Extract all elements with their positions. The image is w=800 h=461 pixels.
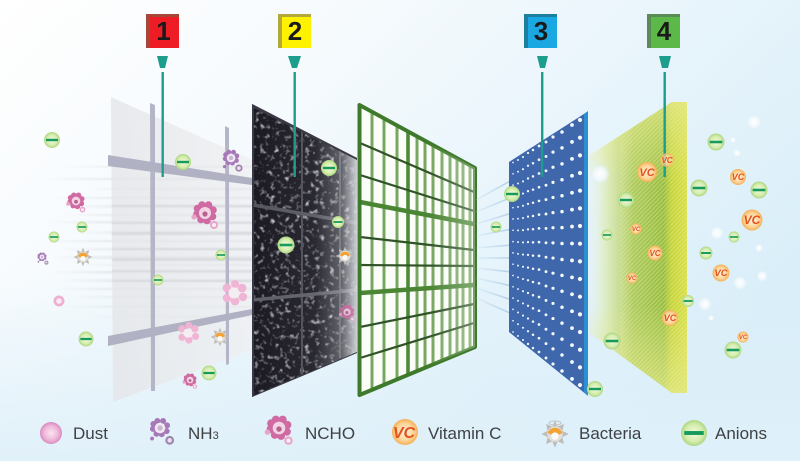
NCHO particles bbox=[66, 193, 355, 389]
panel 2: dark carbon filter bbox=[252, 104, 357, 397]
bacteria particles bbox=[74, 247, 354, 346]
badge 2: 2 bbox=[288, 16, 302, 46]
legend: NCHO: NCHO bbox=[305, 424, 355, 443]
badge 3: 3 bbox=[534, 16, 548, 46]
streaks over the mesh bbox=[112, 205, 252, 282]
badge 4 bbox=[647, 14, 680, 48]
legend: vitamin C: Vitamin C bbox=[428, 424, 501, 443]
badge 2 bbox=[278, 14, 311, 48]
badge 1: 1 bbox=[156, 16, 171, 46]
dust particle bbox=[54, 296, 64, 306]
badge 3 bbox=[524, 14, 557, 48]
badge 4: 4 bbox=[657, 16, 672, 46]
vitamin C particles: VC bbox=[661, 156, 673, 165]
legend: dust bbox=[40, 422, 108, 444]
vitamin C particles: VC bbox=[628, 276, 637, 282]
pointer 3 bbox=[537, 56, 548, 177]
legend: NCHO bbox=[265, 416, 355, 445]
air bubbles bbox=[590, 114, 768, 322]
panel 3: green frame filter bbox=[358, 104, 475, 396]
legend bbox=[40, 416, 767, 448]
badge 1 bbox=[146, 14, 179, 48]
airflow between frame and blue filter bbox=[476, 180, 512, 314]
legend: bacteria bbox=[541, 420, 642, 448]
pointer 1 bbox=[157, 56, 168, 177]
legend: anions: Anions bbox=[715, 424, 767, 443]
legend: vitamin C bbox=[392, 419, 501, 445]
legend: vitamin C: VC bbox=[393, 425, 416, 442]
panel 4: blue perforated filter bbox=[509, 111, 588, 396]
pointer 2 bbox=[288, 56, 301, 177]
incoming air streaks bbox=[40, 166, 252, 318]
legend: bacteria: Bacteria bbox=[579, 424, 642, 443]
vitamin C particles bbox=[626, 153, 762, 342]
vitamin C particles: VC bbox=[632, 227, 641, 233]
vitamin C particles: VC bbox=[744, 213, 761, 227]
vitamin C particles: VC bbox=[739, 335, 748, 341]
legend: dust: Dust bbox=[73, 424, 108, 443]
panel 1: pre-filter mesh bbox=[108, 97, 252, 402]
vitamin C particles: VC bbox=[664, 313, 677, 323]
legend: NH3 bbox=[150, 418, 219, 445]
panel 5: green vitamin C filter bbox=[590, 100, 687, 395]
vitamin C particles: VC bbox=[714, 268, 728, 279]
vitamin C particles: VC bbox=[649, 249, 661, 258]
vitamin C particles: VC bbox=[639, 167, 656, 179]
anion particles bbox=[44, 132, 768, 397]
vitamin C particles: VC bbox=[732, 172, 745, 182]
legend: NH3: NH3 bbox=[188, 424, 219, 443]
legend: anions bbox=[681, 420, 767, 446]
pointer 4 bbox=[659, 56, 671, 177]
NH3 particles bbox=[37, 150, 243, 265]
